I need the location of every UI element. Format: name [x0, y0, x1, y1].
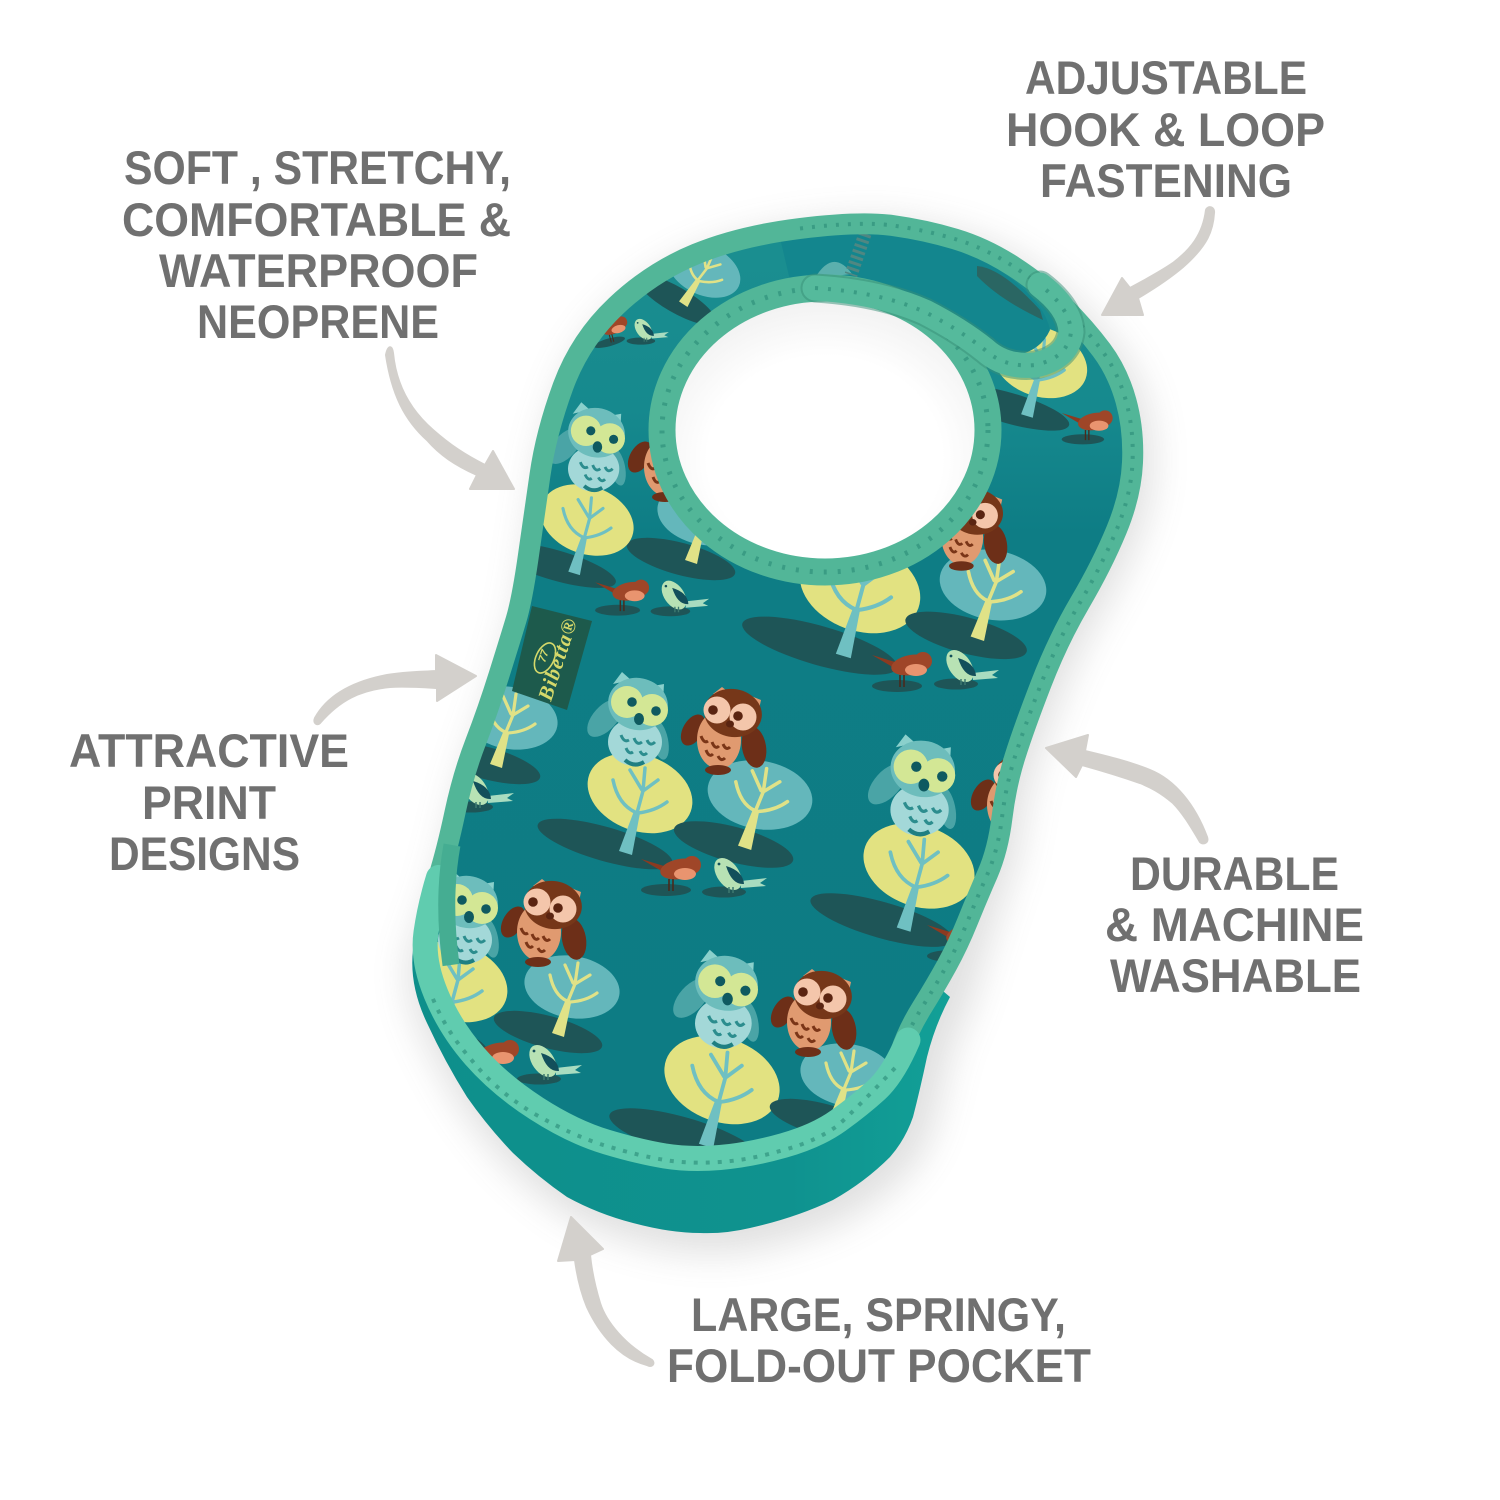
fold-out pocket: [412, 950, 950, 1233]
brand label: [512, 606, 592, 710]
callout: pocket: [667, 1288, 1091, 1392]
callout: machine washable: DURABLE: [1130, 847, 1339, 900]
arrow: pocket: [558, 1217, 653, 1366]
strap teal face and shadow: [780, 226, 1050, 356]
callout: machine washable: & MACHINE: [1105, 898, 1364, 951]
product photo: owl print neoprene bib: [348, 223, 1133, 1233]
rim stitching: [431, 994, 895, 1163]
bib side inside pocket: [447, 845, 452, 965]
callout: fastening: ADJUSTABLE: [1025, 51, 1307, 104]
callout: machine washable: WASHABLE: [1110, 949, 1361, 1002]
brand label: 77: [536, 648, 552, 664]
callout: pocket: FOLD-OUT POCKET: [667, 1339, 1091, 1392]
hook and loop strap end: [815, 285, 1071, 365]
arrow: hook and loop: [1102, 207, 1214, 315]
arrow: neoprene: [386, 347, 514, 489]
bib face: [425, 224, 1133, 1158]
callout: machine washable: [1105, 847, 1364, 1002]
callout: pocket: LARGE, SPRINGY,: [691, 1288, 1066, 1341]
arrow: print designs: [314, 655, 476, 724]
callout: fastening: FASTENING: [1040, 154, 1292, 207]
callout: neoprene: COMFORTABLE &: [122, 193, 511, 246]
soft shadow behind bib: [420, 232, 1141, 1241]
brand label: Bibetta®: [533, 615, 582, 704]
callout: fastening: [1006, 51, 1325, 207]
callout: print designs: [69, 724, 349, 880]
owl and tree print: [348, 223, 1113, 1175]
neck binding and opening: [662, 288, 988, 572]
callout: neoprene: WATERPROOF: [159, 244, 478, 297]
callout: neoprene: NEOPRENE: [197, 295, 439, 348]
arrow: machine washable: [1046, 735, 1207, 843]
callout: print designs: DESIGNS: [109, 827, 300, 880]
callout: fastening: HOOK & LOOP: [1006, 103, 1325, 156]
pocket rim highlight: [425, 878, 908, 1158]
callout: neoprene: SOFT , STRETCHY,: [124, 141, 511, 194]
callout: print designs: ATTRACTIVE: [69, 724, 349, 777]
outer binding: [425, 224, 1133, 1158]
callout: neoprene: [122, 141, 511, 348]
callout: print designs: PRINT: [142, 776, 276, 829]
